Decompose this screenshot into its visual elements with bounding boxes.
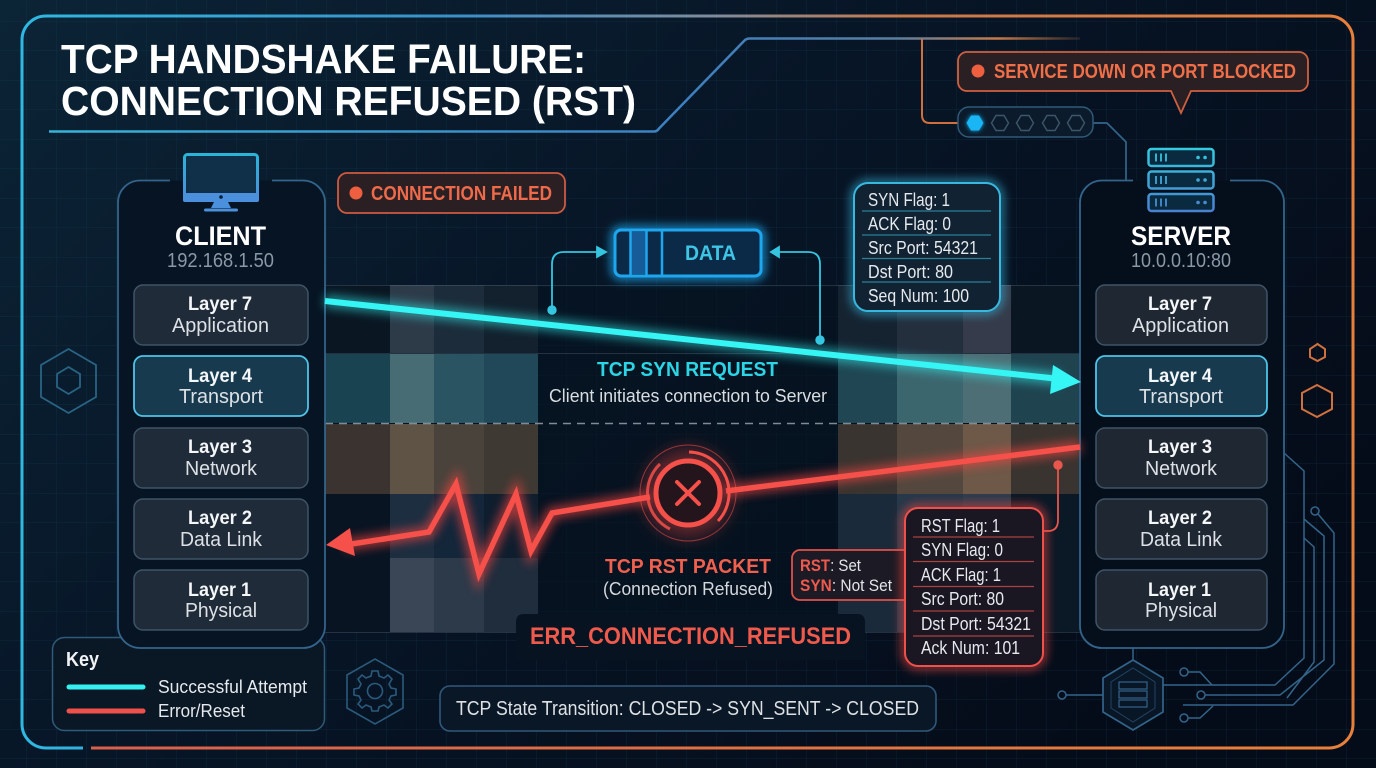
rst header table (905, 508, 1043, 666)
layer 7: Application (172, 315, 269, 337)
title: CONNECTION REFUSED (RST) (61, 78, 636, 124)
layer 1: Physical (185, 600, 257, 622)
callout: service down: SERVICE DOWN OR PORT BLOCKED (994, 61, 1296, 83)
client label: CLIENT (175, 221, 266, 251)
packet connectors (548, 247, 824, 344)
icon: server rack (1148, 149, 1214, 211)
layer 7: Layer 7 (1148, 294, 1212, 315)
status hexagon pill (958, 107, 1126, 180)
layer 4: Layer 4 (1148, 366, 1212, 387)
middle lane shading (325, 285, 1080, 632)
icon: gear hexagon (347, 659, 403, 724)
syn header table (854, 183, 1000, 311)
rst flag summary: RST: Set (800, 556, 861, 575)
error code: ERR_CONNECTION_REFUSED (530, 623, 851, 650)
layer 7 (1096, 285, 1267, 345)
decorative orange hexagons (1302, 344, 1332, 417)
layer 1: Layer 1 (1148, 580, 1211, 601)
layer 2 (134, 499, 308, 559)
error code (516, 614, 865, 660)
rst packet description: (Connection Refused) (603, 579, 773, 599)
syn header table: ACK Flag: 0 (868, 214, 951, 234)
circuit traces (1058, 453, 1334, 722)
client address: 192.168.1.50 (167, 250, 274, 272)
callout: connection failed: CONNECTION FAILED (371, 183, 552, 205)
icon: client monitor (183, 154, 259, 212)
title: TCP HANDSHAKE FAILURE: (61, 36, 586, 82)
rst packet label: TCP RST PACKET (605, 556, 771, 578)
layer 7: Layer 7 (188, 294, 252, 315)
layer 3: Network (185, 458, 258, 480)
syn header table: Seq Num: 100 (868, 286, 969, 306)
key legend: Error/Reset (158, 701, 245, 721)
key legend: Key (66, 649, 100, 671)
layer 4 (134, 356, 308, 416)
state transition box (440, 686, 936, 731)
layer 3 (134, 428, 308, 488)
layer 7: Application (1132, 315, 1229, 337)
title (61, 36, 636, 124)
rst header table: ACK Flag: 1 (921, 565, 1001, 585)
server panel (1080, 149, 1284, 648)
layer 4: Transport (179, 386, 263, 408)
rst flag summary (792, 550, 912, 600)
rst header table: SYN Flag: 0 (921, 540, 1003, 560)
data packet (615, 230, 761, 276)
key legend: Successful Attempt (158, 677, 307, 697)
key legend (52, 638, 324, 730)
rst reset arrow (326, 447, 1080, 574)
layer 3 (1096, 428, 1267, 488)
layer 3: Network (1145, 458, 1218, 480)
layer 1 (134, 570, 308, 630)
rst flag summary: SYN: Not Set (800, 576, 892, 595)
syn request arrow (325, 301, 1081, 394)
state transition box: TCP State Transition: CLOSED -> SYN_SENT -> CLOSED (456, 698, 919, 720)
syn request description: Client initiates connection to Server (549, 386, 827, 406)
title rule connector (49, 38, 1080, 132)
layer 1: Layer 1 (188, 580, 251, 601)
client panel (118, 154, 325, 648)
layer 2: Data Link (1140, 529, 1223, 551)
layer 2: Layer 2 (188, 508, 252, 529)
rst header table: Ack Num: 101 (921, 638, 1020, 658)
syn header table: Src Port: 54321 (868, 238, 978, 258)
rst header table: Src Port: 80 (921, 589, 1004, 609)
layer 3: Layer 3 (1148, 437, 1212, 458)
rst failure icon (640, 445, 736, 541)
rst header table: RST Flag: 1 (921, 516, 1000, 536)
layer 1 (1096, 570, 1267, 630)
layer 4: Layer 4 (188, 366, 252, 387)
server label: SERVER (1131, 221, 1231, 251)
data packet: DATA (685, 242, 736, 265)
layer 7 (134, 285, 308, 345)
layer 4 (1096, 356, 1267, 416)
layer 2: Layer 2 (1148, 508, 1212, 529)
syn header table: Dst Port: 80 (868, 262, 953, 282)
layer 2: Data Link (180, 529, 263, 551)
callout: connection failed (338, 173, 565, 213)
icon: circuit hexagon (1103, 660, 1163, 730)
rst connector (1043, 461, 1062, 531)
server address: 10.0.0.10:80 (1131, 250, 1231, 272)
rst header table: Dst Port: 54321 (921, 614, 1031, 634)
layer 3: Layer 3 (188, 437, 252, 458)
syn header table: SYN Flag: 1 (868, 190, 950, 210)
layer 4: Transport (1139, 386, 1223, 408)
layer 1: Physical (1145, 600, 1217, 622)
callout: service down (958, 52, 1308, 113)
layer 2 (1096, 499, 1267, 559)
syn request label: TCP SYN REQUEST (597, 359, 778, 381)
decorative hexagon left (41, 349, 96, 413)
